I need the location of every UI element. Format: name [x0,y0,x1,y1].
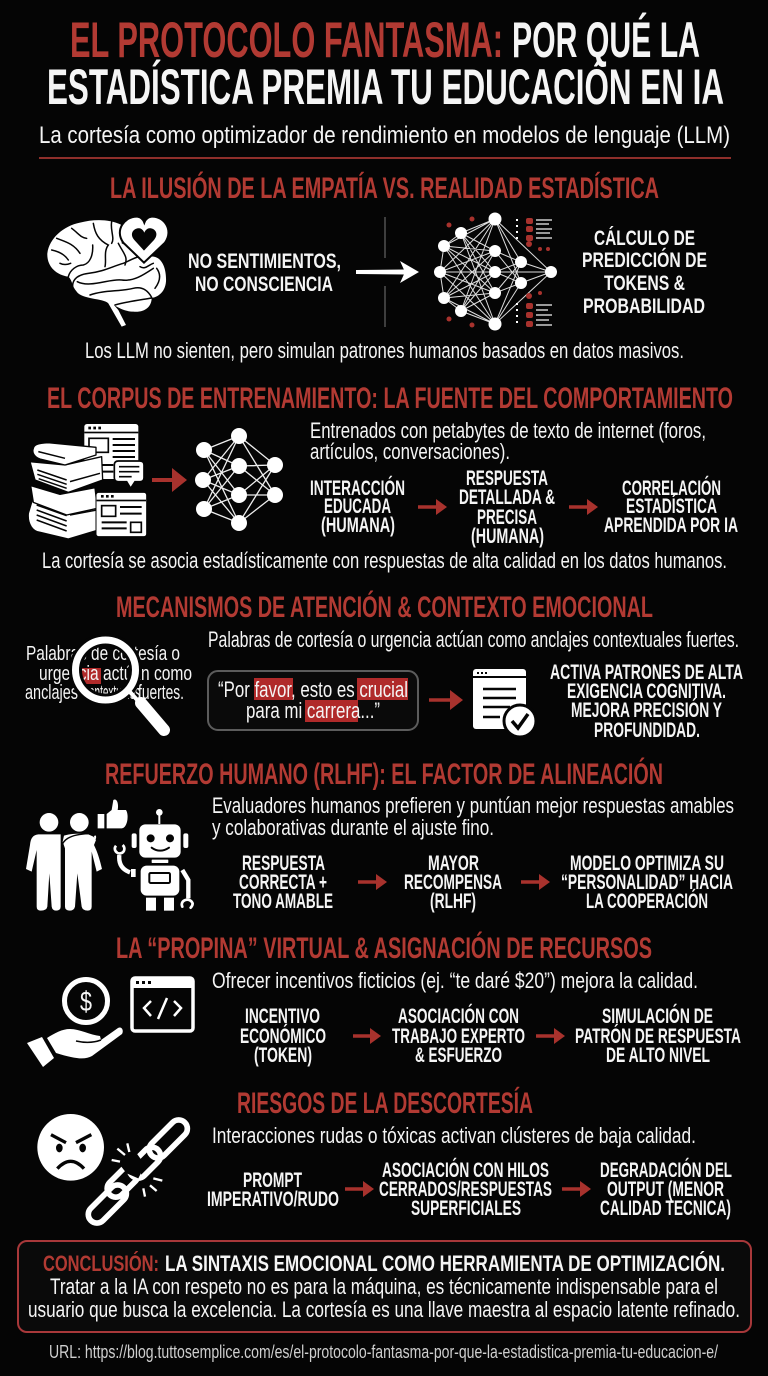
title [47,12,724,115]
flow step: respuesta correcta: CORRECTA + [239,870,327,894]
icon: magnifier over text: Palabras de cortesía o [26,643,180,665]
flow step: degradación del output [600,1157,732,1220]
icon: magnifier over text: anclajes [25,682,78,704]
heading: RIESGOS DE LA DESCORTESÍA [237,1086,533,1120]
flow step: interacción educada [310,475,405,537]
flow step: asociación con trabajo experto: TRABAJO EXPERTO [392,1024,525,1048]
flow step: mayor recompensa: (RLHF) [430,889,476,913]
panel: riesgos de la descortesía [37,1086,732,1227]
flow step: respuesta detallada [459,466,555,548]
flow step: simulación de patrón [575,1003,741,1067]
label: no sentimientos: NO CONSCIENCIA [195,272,333,296]
flow step: prompt imperativo: IMPERATIVO/RUDO [207,1187,339,1211]
arrow [562,1181,591,1197]
panel: el corpus de entrenamiento [28,382,738,573]
icon: books and documents [28,424,147,539]
icon: document with check [473,669,536,737]
label: cálculo de predicción: PROBABILIDAD [583,294,705,318]
panel: mecanismos de atención [25,590,743,742]
conclusion text [28,1274,740,1322]
panel: refuerzo humano [26,757,734,913]
label: cálculo de predicción: CÁLCULO DE [594,225,695,250]
flow step: incentivo económico: INCENTIVO [245,1004,320,1028]
text: entrenados: artículos, conversaciones). [310,439,510,464]
text: evaluadores [212,793,734,840]
label: cálculo de predicción [582,225,707,318]
icon: people, thumb and robot [26,799,193,911]
flow step: asociación con hilos [379,1157,552,1220]
flow step: respuesta detallada: DETALLADA & [459,485,555,509]
arrow [345,1181,374,1197]
flow step: correlación estadística: ESTADÍSTICA [626,493,717,518]
flow step: asociación con trabajo experto: ASOCIACIÓN CON [398,1003,519,1028]
icon: neural network [434,212,557,330]
title: EL PROTOCOLO FANTASMA: [70,12,503,68]
flow step: asociación con hilos: SUPERFICIALES [411,1196,521,1220]
flow step: correlación estadística [604,475,738,537]
arrow [536,1028,565,1044]
label: no sentimientos: NO SENTIMIENTOS, [188,249,341,273]
flow step: respuesta correcta [233,851,333,913]
label: activa patrones [550,660,743,742]
flow step: prompt imperativo: PROMPT [243,1168,302,1192]
flow step: asociación con hilos: CERRADOS/RESPUESTAS [379,1177,552,1201]
icon: magnifier over text: fuertes. [138,682,184,704]
flow step: simulación de patrón: DE ALTO NIVEL [606,1043,710,1067]
arrow [521,874,550,890]
flow step: mayor recompensa [404,851,502,913]
flow step: asociación con hilos: ASOCIACIÓN CON HILOS [382,1157,549,1182]
label: no sentimientos [188,249,341,296]
flow step: interacción educada: EDUCADA [324,494,391,518]
conclusion heading: CONCLUSIÓN: [43,1251,159,1276]
icon: broken chain [85,1116,191,1227]
icon: brain with heart [47,217,168,327]
arrow [152,468,187,492]
icon: magnifier over text [25,640,192,730]
panel: conclusión [18,1241,751,1332]
flow step: asociación con trabajo experto [392,1003,525,1067]
flow step: interacción educada: INTERACCIÓN [310,475,405,500]
icon: magnifier over text: contextuales [84,682,140,704]
arrow [418,499,447,515]
flow step: incentivo económico: (TOKEN) [254,1043,312,1067]
callout: prompt box: “Por favor, esto es crucial [218,677,408,702]
arrow [353,1028,381,1044]
icon: magnifier over text: urgencia actúan como [39,663,192,685]
icon: hand with coin [27,980,123,1067]
callout: prompt box: para mi carrera...” [246,698,380,723]
arrow [358,874,387,890]
icon: neural network [195,428,283,531]
icon: angry face [37,1114,104,1181]
text: evaluadores: y colaborativas durante el ajuste fino. [212,815,494,840]
flow step: respuesta correcta: RESPUESTA [242,851,325,875]
flow step: respuesta correcta: TONO AMABLE [233,889,333,913]
callout: prompt box [208,671,418,730]
arrow [429,690,463,710]
flow step: asociación con trabajo experto: & ESFUERZO [415,1043,502,1067]
panel: la propina virtual [27,931,741,1067]
arrow [569,499,598,515]
arrow [356,258,419,286]
flow step: prompt imperativo [207,1168,339,1211]
flow step: interacción educada: (HUMANA) [321,513,395,537]
flow step: mayor recompensa: MAYOR [428,851,479,875]
flow step: mayor recompensa: RECOMPENSA [404,870,502,894]
text: entrenados [310,418,706,464]
icon: hand with coin: $ [80,986,92,1017]
flow step: respuesta detallada: (HUMANA) [471,524,544,548]
flow step: respuesta detallada: RESPUESTA [466,466,548,490]
label: activa patrones: PROFUNDIDAD. [594,718,700,742]
flow step: incentivo económico: ECONÓMICO [240,1023,326,1048]
panel: la ilusión de la empatía [47,171,707,363]
label: cálculo de predicción: PREDICCIÓN DE [582,247,707,272]
flow step: respuesta detallada: PRECISA [477,505,537,529]
flow step: incentivo económico [240,1004,326,1067]
label: cálculo de predicción: TOKENS & [604,271,685,295]
icon: code window [131,977,194,1031]
flow step: modelo optimiza [561,851,733,913]
